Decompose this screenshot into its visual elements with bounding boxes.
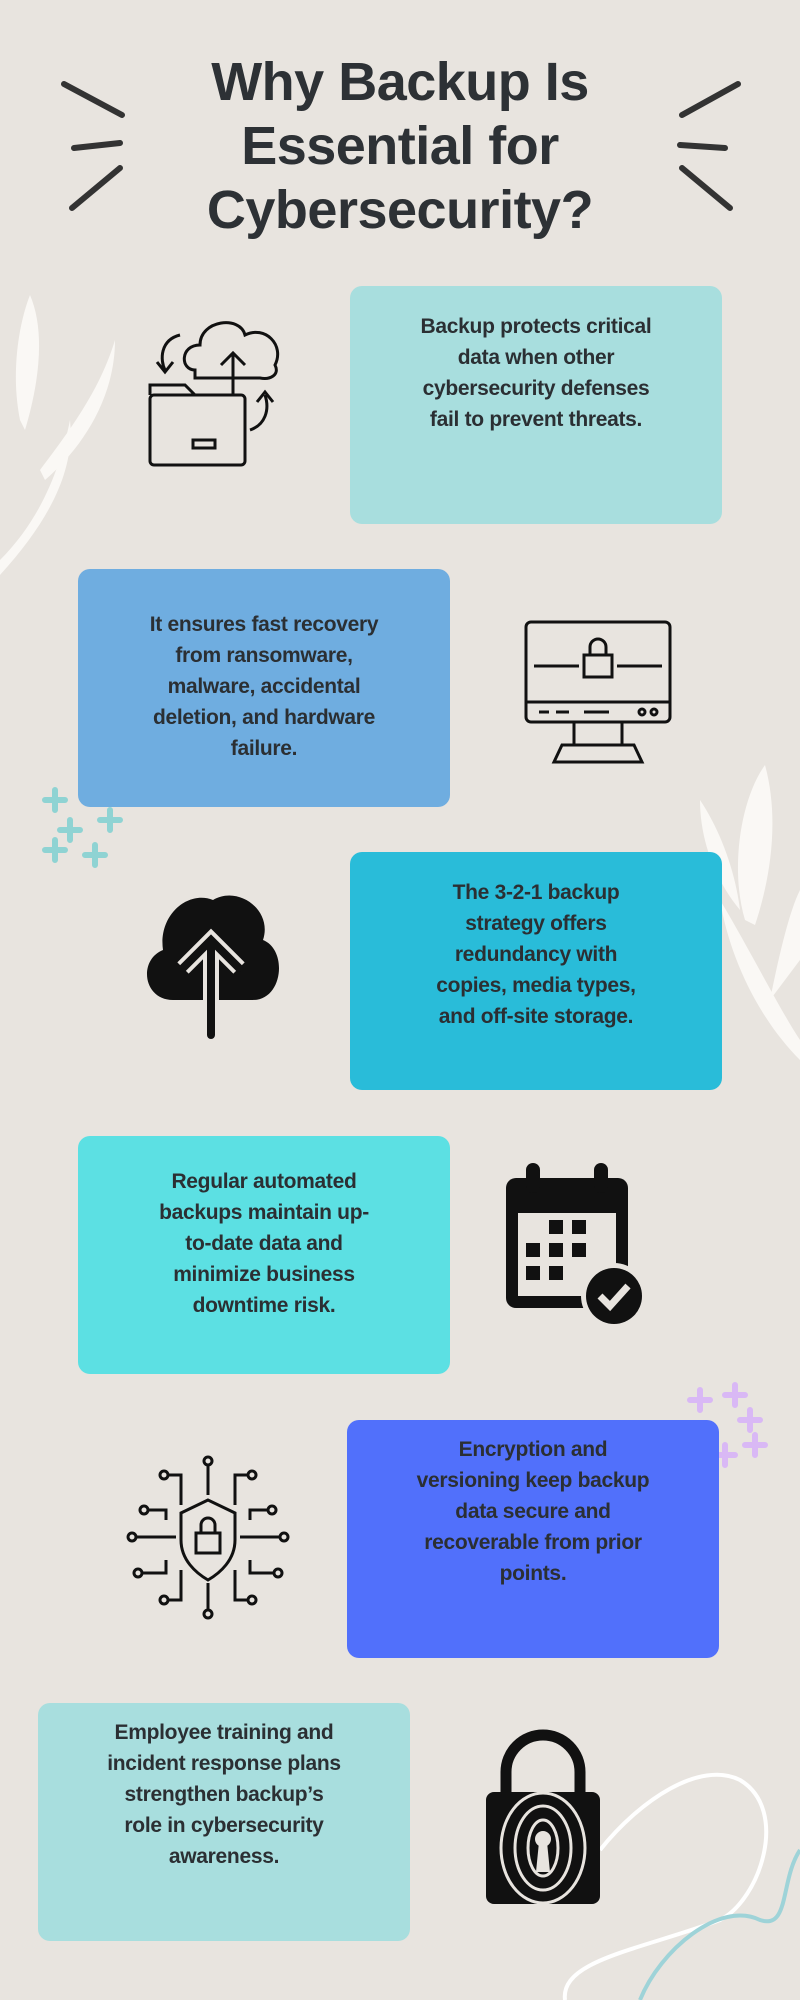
panel 4: downtime risk. bbox=[193, 1294, 335, 1317]
panel 5: recoverable from prior bbox=[424, 1531, 642, 1554]
title: Why Backup Is bbox=[211, 52, 589, 112]
panel 6: awareness. bbox=[169, 1845, 279, 1868]
panel 2: failure. bbox=[231, 737, 297, 760]
icon: circuit shield bbox=[126, 1456, 290, 1620]
panel 4: to-date data and bbox=[185, 1232, 343, 1255]
panel 1: Backup protects critical bbox=[421, 315, 651, 338]
panel 3: The 3-2-1 backup bbox=[453, 881, 619, 904]
panel 1: data when other bbox=[458, 346, 614, 369]
icon: fingerprint lock bbox=[486, 1730, 600, 1904]
panel 3: copies, media types, bbox=[436, 974, 636, 997]
panel 4: minimize business bbox=[173, 1263, 355, 1286]
panel 4: backups maintain up- bbox=[159, 1201, 369, 1224]
panel 5: data secure and bbox=[455, 1500, 611, 1523]
panel 2 bbox=[78, 569, 450, 807]
panel 5: Encryption and bbox=[459, 1438, 607, 1461]
panel 6: role in cybersecurity bbox=[124, 1814, 324, 1837]
panel 6: strengthen backup’s bbox=[125, 1783, 323, 1806]
panel 3: strategy offers bbox=[465, 912, 607, 935]
panel 2: from ransomware, bbox=[175, 644, 353, 667]
panel 6 bbox=[38, 1703, 410, 1941]
panel 5 bbox=[347, 1420, 719, 1658]
panel 2: deletion, and hardware bbox=[153, 706, 375, 729]
panel 5: versioning keep backup bbox=[417, 1469, 649, 1492]
panel 4 bbox=[78, 1136, 450, 1374]
panel 1: cybersecurity defenses bbox=[423, 377, 649, 400]
panel 3 bbox=[350, 852, 722, 1090]
decorative title strokes bbox=[61, 81, 741, 211]
panel 3: and off-site storage. bbox=[439, 1005, 633, 1028]
icon: calendar check bbox=[506, 1163, 642, 1324]
title bbox=[207, 52, 593, 240]
icon: cloud upload bbox=[147, 896, 279, 1039]
panel 5: points. bbox=[500, 1562, 566, 1585]
icon: cloud folder sync bbox=[148, 321, 280, 466]
panel 4: Regular automated bbox=[171, 1170, 357, 1193]
title: Essential for bbox=[241, 116, 559, 176]
panel 6: incident response plans bbox=[107, 1752, 341, 1775]
panel 1: fail to prevent threats. bbox=[430, 408, 642, 431]
panel 6: Employee training and bbox=[115, 1721, 333, 1744]
panel 1 bbox=[350, 286, 722, 524]
icon: locked monitor bbox=[524, 620, 672, 764]
panel 3: redundancy with bbox=[455, 943, 617, 966]
panel 2: malware, accidental bbox=[168, 675, 360, 698]
panel 2: It ensures fast recovery bbox=[150, 613, 378, 636]
title: Cybersecurity? bbox=[207, 180, 593, 240]
